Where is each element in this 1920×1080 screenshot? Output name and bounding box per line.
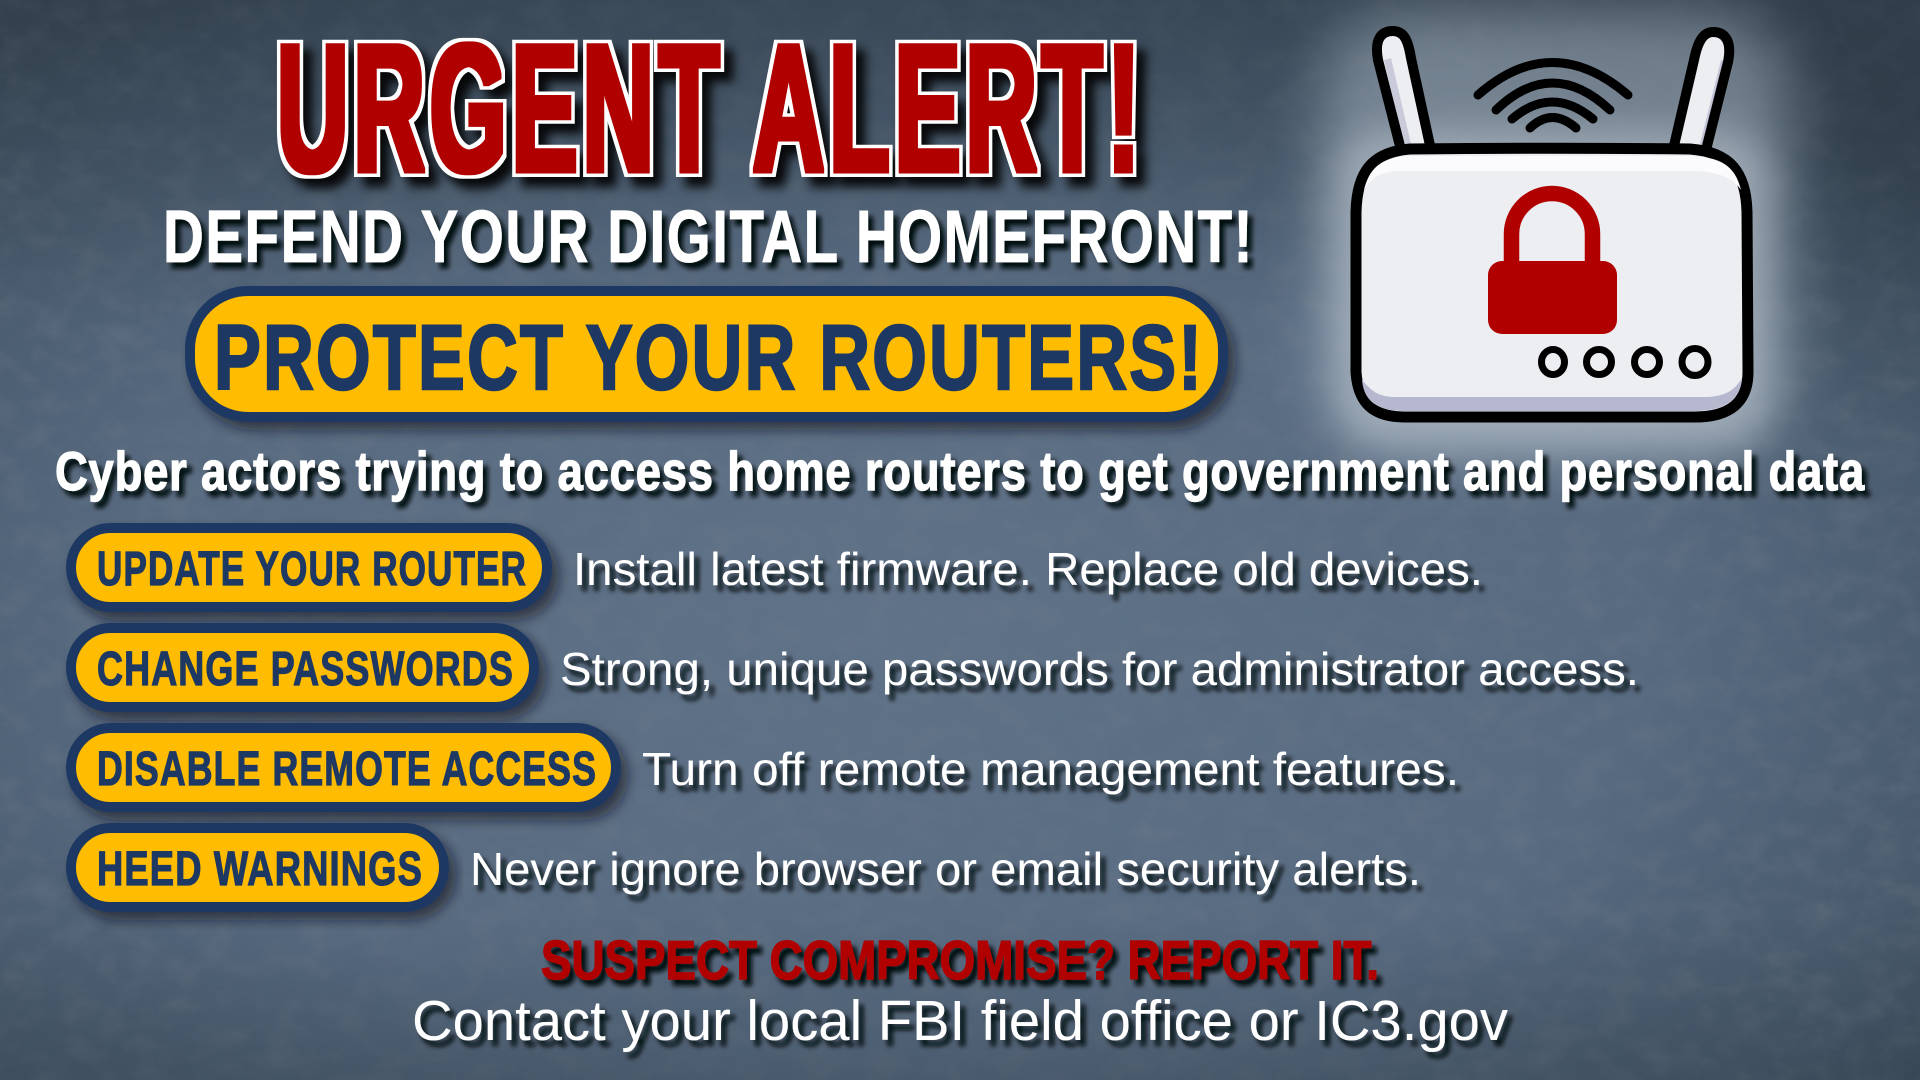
pill: heed warnings xyxy=(71,828,444,907)
action row: change passwords xyxy=(71,628,1639,707)
description: security alerts: Never ignore browser or email security alerts. xyxy=(470,843,1421,895)
pill: heed warnings: HEED WARNINGS xyxy=(97,843,423,896)
action row: update your router xyxy=(71,528,1483,607)
router illustration xyxy=(1320,10,1790,460)
pill: update your router xyxy=(71,528,547,607)
pill: disable remote access xyxy=(71,728,616,807)
action row: heed warnings xyxy=(71,828,1421,907)
banner: protect your routers xyxy=(190,291,1223,417)
pill: disable remote access: DISABLE REMOTE ACCESS xyxy=(97,743,597,796)
icon: red padlock xyxy=(1488,194,1617,334)
action row: disable remote access xyxy=(71,728,1459,807)
icon: right antenna xyxy=(1673,32,1729,150)
pill: update your router: UPDATE YOUR ROUTER xyxy=(97,543,527,596)
router glow xyxy=(1320,10,1790,460)
description: passwords: Strong, unique passwords for administrator access. xyxy=(560,643,1639,695)
status lights xyxy=(1542,348,1708,376)
icon: left antenna xyxy=(1377,31,1431,150)
pill: change passwords xyxy=(71,628,534,707)
title: urgent alert: URGENT ALERT! xyxy=(277,6,1145,210)
callout: suspect compromise: SUSPECT COMPROMISE? REPORT IT. xyxy=(541,929,1379,991)
banner: protect your routers: PROTECT YOUR ROUTERS! xyxy=(214,307,1204,409)
contact line: Contact your local FBI field office or IC3.gov xyxy=(412,989,1508,1053)
subtitle: defend your digital homefront: DEFEND YOUR DIGITAL HOMEFRONT! xyxy=(163,195,1254,278)
description: remote management: Turn off remote management features. xyxy=(642,743,1459,795)
description: firmware: Install latest firmware. Replace old devices. xyxy=(573,543,1483,595)
icon: wifi signal xyxy=(1478,62,1628,128)
router body xyxy=(1356,148,1748,417)
pill: change passwords: CHANGE PASSWORDS xyxy=(97,643,514,696)
